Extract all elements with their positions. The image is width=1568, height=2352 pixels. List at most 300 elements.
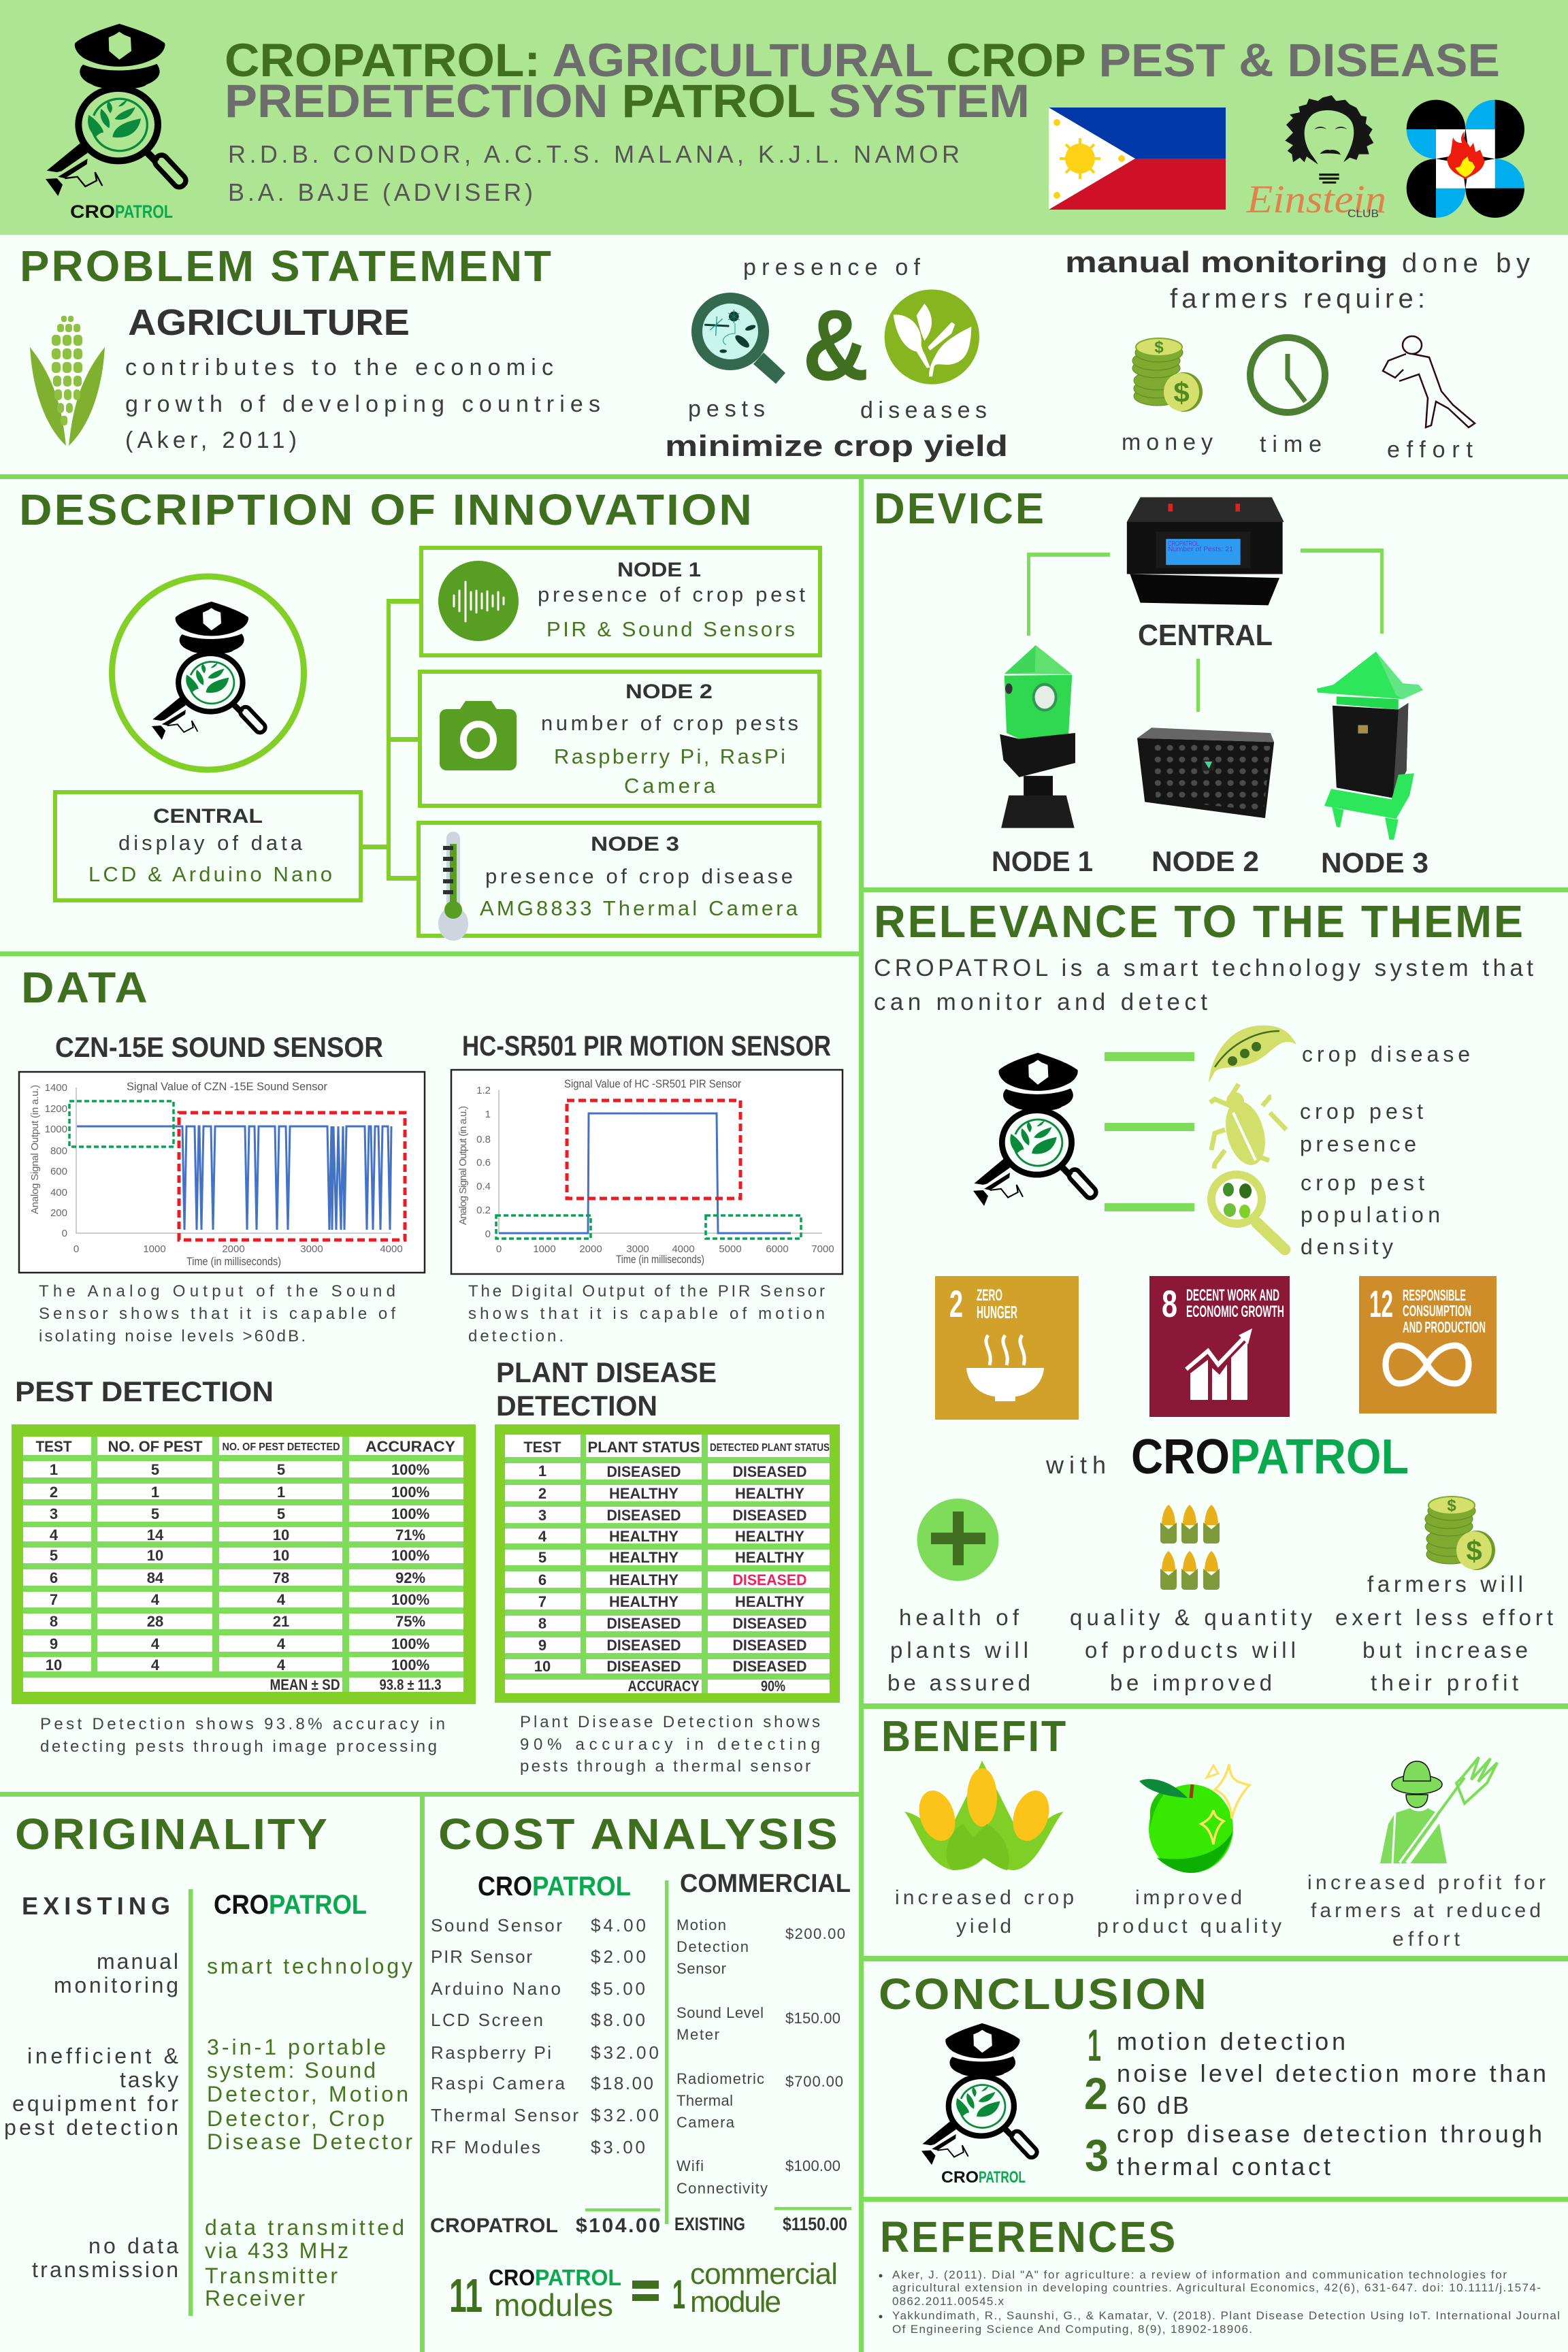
numbered conclusions: thermal contact [1117, 2153, 1330, 2180]
table: pest detection: 100% [391, 1635, 429, 1652]
icon: corn cobs [904, 1761, 1064, 1870]
text: manual monitoring: manual monitoring [1065, 246, 1388, 279]
table: pest detection: 1 [50, 1461, 58, 1478]
equation: modules comparison: CRO [489, 2265, 535, 2290]
icon: sdg 2 zero hunger: 2 [949, 1282, 963, 1325]
panel: references [864, 2197, 1568, 2336]
table: plant disease detection [495, 1424, 840, 1703]
list: commercial costs: Camera [676, 2114, 735, 2131]
text: pir sensor caption: detection. [468, 1327, 564, 1345]
icon: ampersand: & [802, 289, 869, 402]
table: plant disease detection: DISEASED [607, 1637, 681, 1654]
table: pest detection: 4 [50, 1526, 59, 1544]
table: plant disease detection: 1 [538, 1463, 546, 1480]
text: manual monitoring: farmers require: [1170, 284, 1425, 314]
icon: sound wave [438, 561, 519, 641]
icon: sdg 12 responsible consumption: RESPONSIBLE [1403, 1286, 1466, 1304]
chart: pir sensor: Time (in milliseconds) [616, 1253, 704, 1266]
list: cropatrol costs: PIR Sensor [431, 1946, 532, 1967]
text: presence of: presence of [743, 255, 921, 280]
text: increased profit [1307, 1872, 1546, 1950]
table: plant disease detection: 5 [538, 1549, 546, 1566]
label: node 1: NODE 1 [992, 845, 1093, 877]
device: node 1 [1000, 645, 1075, 828]
numbered conclusions: 2 [1084, 2068, 1108, 2119]
text: farmers effort: but increase [1362, 1637, 1528, 1663]
chart: sound sensor: Signal Value of CZN -15E Sound Sensor [127, 1080, 327, 1093]
table: plant disease detection: HEALTHY [735, 1485, 804, 1502]
text: relevance labels: density [1301, 1235, 1393, 1259]
equation: modules comparison: 1 [672, 2272, 685, 2317]
text: cropatrol points: via 433 MHz [205, 2238, 348, 2263]
chart: sound sensor: 400 [50, 1187, 67, 1198]
table: pest detection: 4 [277, 1656, 286, 1673]
heading: references: REFERENCES [880, 2212, 1177, 2261]
text: farmers effort: their profit [1371, 1670, 1518, 1695]
text: increased profit: farmers at reduced [1311, 1899, 1541, 1922]
list: cropatrol costs: Raspberry Pi [431, 2042, 551, 2063]
text: relevance labels: crop pest [1301, 1171, 1424, 1195]
table: plant disease detection: DISEASED [607, 1658, 681, 1675]
table: pest detection: 100% [391, 1484, 429, 1501]
text: quality and quantity [1070, 1605, 1312, 1695]
text: increased profit: increased profit for [1307, 1872, 1546, 1894]
table: plant disease detection: DETECTED PLANT STATUS [710, 1442, 830, 1454]
chart: sound sensor: 800 [50, 1145, 67, 1157]
heading: plant disease detection [496, 1356, 717, 1422]
icon: cropatrol logo: CRO [70, 201, 115, 222]
icon: einstein club logo [1246, 95, 1386, 221]
list: cropatrol costs: $32.00 [591, 2105, 659, 2125]
table: pest detection: 7 [50, 1591, 58, 1608]
icon: camera [440, 701, 517, 770]
chart: sound sensor: 1000 [143, 1243, 166, 1255]
text: existing points: no data [88, 2234, 178, 2258]
text: existing points: tasky [120, 2068, 178, 2092]
text: relevance labels: presence [1300, 1132, 1416, 1156]
table: plant disease detection: DISEASED [607, 1507, 681, 1524]
table: pest detection: 100% [391, 1547, 429, 1564]
equation: modules comparison: PATROL [535, 2265, 621, 2290]
text: health of plants: plants will [890, 1637, 1028, 1663]
table: plant disease detection: HEALTHY [609, 1549, 679, 1566]
heading: problem statement: PROBLEM STATEMENT [20, 242, 553, 291]
table: pest detection: 8 [50, 1613, 58, 1630]
heading: relevance: RELEVANCE TO THE THEME [874, 896, 1525, 947]
chart: pir sensor: 0 [496, 1243, 502, 1255]
chart: sound sensor: Analog Signal Output (in a.u.) [29, 1085, 41, 1214]
table: plant disease detection: DISEASED [732, 1658, 807, 1675]
table: plant disease detection: HEALTHY [609, 1528, 679, 1545]
numbered conclusions: motion detection [1117, 2027, 1345, 2055]
text: relevance intro [874, 955, 1533, 1015]
icon: diseases leaf [885, 289, 979, 385]
chart: pir sensor: 0.8 [476, 1134, 491, 1145]
device: central unit [1127, 497, 1284, 605]
panel: header [0, 0, 1568, 235]
panel: cost analysis [430, 1810, 851, 2323]
list: cropatrol costs: $4.00 [591, 1915, 646, 1936]
device screen text [1168, 540, 1233, 553]
table: pest detection: 21 [273, 1613, 289, 1630]
icon: money [1132, 338, 1203, 412]
equation: modules comparison: 11 [449, 2269, 483, 2322]
table: plant disease detection: 7 [538, 1593, 546, 1610]
table: pest detection: 14 [147, 1526, 164, 1544]
table: plant disease detection: TEST [524, 1439, 561, 1456]
text: sound sensor caption: Sensor shows that it is capable of [39, 1305, 395, 1323]
table: plant disease detection: DISEASED [732, 1507, 807, 1524]
total: cropatrol: $104.00 [576, 2215, 660, 2237]
list: commercial costs [676, 1916, 845, 2197]
total: cropatrol: CROPATROL [430, 2215, 558, 2237]
heading: data: DATA [21, 963, 150, 1012]
icon: pest population magnifier [1211, 1175, 1285, 1250]
list: cropatrol costs: $5.00 [591, 1978, 645, 1999]
text: manual monitoring [1065, 246, 1530, 314]
connector lines [1027, 549, 1384, 712]
panel: description of innovation [0, 474, 1568, 2352]
box: central [55, 792, 361, 900]
icon: cropatrol logo [46, 24, 188, 222]
list: cropatrol costs: Sound Sensor [431, 1915, 562, 1936]
text: existing points: transmission [32, 2257, 178, 2282]
chart: pir sensor: 0.2 [476, 1205, 491, 1216]
chart: pir sensor: 3000 [626, 1243, 649, 1255]
table: plant disease detection: 90% [761, 1678, 785, 1695]
chart: pir sensor: Analog Signal Output (in a.u.) [457, 1106, 469, 1225]
box: node 2: Camera [624, 774, 716, 798]
list: cropatrol costs: $3.00 [591, 2137, 645, 2157]
heading: pir sensor: HC-SR501 PIR MOTION SENSOR [462, 1030, 831, 1062]
table: plant disease detection: HEALTHY [735, 1528, 804, 1545]
chart: sound sensor: 0 [62, 1228, 67, 1239]
text: with cropatrol: PATROL [1230, 1430, 1409, 1484]
panel: data [0, 951, 861, 1776]
text: improved quality: improved [1135, 1886, 1242, 1909]
table: pest detection: 5 [277, 1505, 285, 1522]
list: cropatrol costs: $32.00 [591, 2042, 659, 2063]
table: pest detection [12, 1424, 476, 1704]
text: existing points: manual [97, 1949, 178, 1974]
text: cropatrol points: system: Sound [207, 2058, 376, 2082]
icon: diseased leaf [1209, 1026, 1296, 1083]
text: relevance labels [1300, 1042, 1470, 1259]
heading: pest detection: PEST DETECTION [15, 1375, 274, 1407]
chart: pir sensor: 6000 [766, 1243, 789, 1255]
table: plant disease detection: DISEASED [732, 1463, 807, 1480]
text: time label: time [1260, 431, 1322, 457]
icon: effort stick figure [1383, 336, 1475, 427]
logotype: cropatrol: CRO [478, 1872, 532, 1901]
box: node 2 [420, 672, 819, 806]
total: cropatrol [430, 2215, 660, 2237]
list: commercial costs: Sensor [676, 1960, 726, 1977]
text: sound sensor caption: isolating noise levels >60dB. [39, 1327, 306, 1345]
table: plant disease detection: HEALTHY [609, 1485, 679, 1502]
icon: logo [921, 2023, 1039, 2187]
text: relevance labels: crop disease [1302, 1042, 1470, 1066]
title: PREDETECTION PATROL SYSTEM [225, 75, 1030, 127]
chart: pir sensor: 0 [485, 1228, 491, 1240]
table: pest detection: MEAN ± SD [270, 1676, 340, 1693]
text: plant disease caption: pests through a thermal sensor [520, 1757, 811, 1776]
icon: cropatrol logo: PATROL [115, 201, 173, 222]
box: central: CENTRAL [153, 805, 263, 828]
list: cropatrol costs: RF Modules [431, 2137, 540, 2157]
logotype: cropatrol [214, 1890, 367, 1920]
numbered conclusions: 1 [1088, 2020, 1101, 2070]
list: commercial costs: $200.00 [785, 1925, 845, 1942]
table: plant disease detection: 9 [538, 1637, 546, 1654]
table: pest detection: TEST [35, 1438, 72, 1455]
text: plant disease caption: 90% accuracy in detecting [520, 1735, 820, 1754]
logotype: cropatrol [478, 1872, 631, 1901]
box: node 1 [421, 548, 820, 655]
list: commercial costs: $100.00 [785, 2157, 840, 2174]
heading: benefit: BENEFIT [881, 1712, 1068, 1761]
chart: sound sensor: 1200 [45, 1103, 67, 1115]
text: pests label: pests [688, 396, 765, 422]
text: relevance labels: population [1301, 1203, 1440, 1227]
text: existing points: inefficient & [27, 2044, 178, 2068]
connector bars [1105, 1052, 1194, 1211]
text: cropatrol points: Transmitter [205, 2264, 338, 2288]
total: existing: $1150.00 [783, 2214, 847, 2234]
box: node 3: AMG8833 Thermal Camera [480, 896, 798, 920]
device: node 3 [1317, 652, 1423, 840]
text: quality and quantity: of products will [1085, 1637, 1296, 1663]
title [225, 34, 1500, 127]
text: existing points: equipment for [12, 2091, 178, 2116]
box: node 3: presence of crop disease [485, 864, 793, 888]
text: existing points: pest detection [4, 2115, 178, 2140]
chart: pir sensor: 1 [485, 1109, 491, 1120]
text: pest detection caption: Pest Detection shows 93.8% accuracy in [40, 1715, 445, 1733]
chart: pir sensor: 0.6 [476, 1157, 491, 1169]
equation: modules comparison: module [690, 2285, 781, 2319]
chart: sound sensor: 3000 [300, 1243, 323, 1255]
icon: sdg 12 responsible consumption: CONSUMPTION [1403, 1302, 1471, 1320]
text: existing points [4, 1949, 178, 2282]
icon: thermometer [438, 832, 468, 941]
table: pest detection: 5 [277, 1461, 285, 1478]
box: node 1: presence of crop pest [538, 583, 805, 606]
table: pest detection: 28 [147, 1613, 163, 1630]
icon: coins [1425, 1497, 1495, 1570]
table: pest detection: NO. OF PEST [108, 1438, 203, 1455]
text: health of plants [887, 1605, 1030, 1695]
icon: logo: CRO [941, 2168, 979, 2187]
table: pest detection: 75% [395, 1613, 425, 1630]
heading: existing: EXISTING [22, 1892, 170, 1920]
panel: benefit [864, 1703, 1568, 1950]
table: pest detection: 5 [151, 1505, 159, 1522]
text: cropatrol points: Detector, Crop [207, 2106, 385, 2131]
text: plant disease caption [520, 1713, 820, 1776]
table: pest detection: 10 [273, 1547, 289, 1564]
chart: sound sensor: Time (in milliseconds) [186, 1255, 281, 1268]
text: health of plants: be assured [887, 1670, 1030, 1695]
equation: modules comparison [449, 2257, 838, 2323]
text: effort label: effort [1387, 437, 1473, 463]
list: commercial costs: Detection [676, 1938, 749, 1955]
text: relevance intro: can monitor and detect [874, 989, 1207, 1015]
total: existing [674, 2214, 847, 2234]
text: sound sensor caption [39, 1282, 395, 1345]
panel: relevance to the theme [864, 887, 1568, 1695]
chart: sound sensor: 2000 [222, 1243, 245, 1255]
table: pest detection: ACCURACY [365, 1438, 455, 1455]
chart: pir sensor: 4000 [672, 1243, 695, 1255]
text: farmers effort [1335, 1571, 1553, 1695]
table: pest detection: 4 [151, 1635, 160, 1652]
table: plant disease detection: DISEASED [607, 1463, 681, 1480]
table: pest detection: 92% [395, 1569, 425, 1586]
table: plant disease detection: HEALTHY [609, 1593, 679, 1610]
list: cropatrol costs: Thermal Sensor [431, 2105, 578, 2125]
list: cropatrol costs: Arduino Nano [431, 1978, 561, 1999]
table: pest detection: 100% [391, 1656, 429, 1673]
icon: einstein club logo: CLUB [1348, 208, 1379, 220]
icon: sdg 2 zero hunger: HUNGER [977, 1302, 1017, 1322]
box: node 2: Raspberry Pi, RasPi [554, 745, 785, 768]
box: node 2: number of crop pests [541, 711, 798, 735]
icon: pests magnifier [697, 298, 785, 384]
heading: description of innovation: DESCRIPTION OF INNOVATION [19, 485, 754, 534]
numbered conclusions: noise level detection more than [1117, 2059, 1546, 2087]
table: plant disease detection: ACCURACY [627, 1678, 700, 1695]
text: increased crop yield: increased crop [895, 1886, 1074, 1909]
list: commercial costs: Thermal [676, 2092, 733, 2109]
icon: sdg 8 decent work: ECONOMIC GROWTH [1186, 1303, 1284, 1321]
chart: sound sensor: 600 [50, 1166, 67, 1177]
text: agriculture description [125, 355, 600, 453]
table: plant disease detection: DISEASED [732, 1637, 807, 1654]
icon: pest bug [1210, 1084, 1286, 1169]
numbered conclusions: 60 dB [1117, 2091, 1189, 2119]
icon: sdg 2 zero hunger: ZERO [977, 1286, 1002, 1305]
logotype: cropatrol: PATROL [532, 1872, 631, 1901]
box: node 3 [419, 823, 819, 941]
table: pest detection: 6 [50, 1569, 58, 1586]
table: pest detection: 9 [50, 1635, 58, 1652]
heading: agriculture: AGRICULTURE [128, 302, 410, 343]
icon: einstein club logo: Einstein [1246, 177, 1386, 221]
authors: R.D.B. CONDOR, A.C.T.S. MALANA, K.J.L. NAMOR [228, 140, 960, 168]
text: reference list [879, 2268, 1560, 2336]
chart: pir sensor: Signal Value of HC -SR501 PIR Sensor [564, 1077, 741, 1090]
list: cropatrol costs: $2.00 [591, 1946, 646, 1967]
chart: pir sensor: 1.2 [476, 1085, 491, 1096]
text: cropatrol points: smart technology [207, 1954, 412, 1978]
text: quality and quantity: quality & quantity [1070, 1605, 1312, 1630]
table: plant disease detection: HEALTHY [735, 1593, 804, 1610]
text: plant disease caption: Plant Disease Detection shows [520, 1713, 820, 1731]
icon: sdg 12 responsible consumption: 12 [1369, 1282, 1393, 1325]
icon: philippine flag [1049, 108, 1226, 210]
text: cropatrol points: Detector, Motion [207, 2082, 408, 2106]
list: commercial costs: Sound Level [676, 2004, 764, 2021]
list: cropatrol costs: Raspi Camera [431, 2073, 566, 2093]
text: cropatrol points: data transmitted [205, 2215, 404, 2240]
text: money label: money [1122, 429, 1213, 455]
chart: sound sensor [19, 1072, 425, 1273]
table: pest detection: 4 [277, 1591, 286, 1608]
box: central: LCD & Arduino Nano [88, 862, 332, 886]
text: with cropatrol: with [1045, 1451, 1106, 1479]
text: cropatrol points: Receiver [205, 2286, 305, 2310]
heading: plant disease detection: DETECTION [496, 1390, 657, 1422]
table: pest detection: 4 [151, 1591, 160, 1608]
text: manual monitoring: done by [1402, 248, 1530, 278]
text: improved quality [1097, 1886, 1281, 1938]
table: pest detection: 71% [395, 1526, 425, 1544]
icon: sdg 8 decent work [1149, 1276, 1290, 1417]
text: reference list: Of Engineering Science And Computing, 8(9), 18902-18906. [892, 2323, 1252, 2336]
table: pest detection: 93.8 ± 11.3 [380, 1676, 441, 1693]
icon: sdg 8 decent work: 8 [1162, 1282, 1177, 1325]
table: pest detection: 5 [151, 1461, 159, 1478]
heading: conclusion: CONCLUSION [879, 1970, 1209, 2019]
table: pest detection: 100% [391, 1505, 429, 1522]
total: existing: EXISTING [674, 2214, 745, 2234]
list: commercial costs: $700.00 [785, 2073, 843, 2090]
chart: sound sensor: 1000 [45, 1124, 67, 1135]
chart: pir sensor: 1000 [533, 1243, 556, 1255]
chart: sound sensor: 4000 [380, 1243, 403, 1255]
icon: clock [1250, 338, 1325, 412]
panel: device [874, 484, 1428, 879]
label: node 3: NODE 3 [1321, 847, 1428, 879]
text: agriculture description: contributes to the economic [125, 355, 553, 380]
list: commercial costs: Radiometric [676, 2070, 764, 2087]
table: pest detection: 84 [147, 1569, 164, 1586]
box: node 3: NODE 3 [591, 833, 679, 855]
chart: sound sensor: 200 [50, 1207, 67, 1219]
text: pest detection caption: detecting pests through image processing [40, 1737, 437, 1756]
icon: logo in circle [112, 576, 304, 770]
text: increased crop yield [895, 1886, 1074, 1938]
chart: pir sensor: 5000 [719, 1243, 742, 1255]
table: pest detection: 1 [277, 1484, 285, 1501]
text: increased profit: effort [1392, 1928, 1460, 1950]
heading: commercial: COMMERCIAL [680, 1869, 851, 1898]
list: cropatrol costs [431, 1915, 659, 2157]
text: improved quality: product quality [1097, 1915, 1281, 1938]
logotype: cropatrol: CRO [214, 1890, 269, 1920]
text: pir sensor caption [468, 1282, 825, 1345]
text: minimize crop yield: minimize crop yield [665, 429, 1008, 463]
heading: device: DEVICE [874, 484, 1046, 533]
table: plant disease detection: HEALTHY [609, 1571, 679, 1588]
table: plant disease detection: DISEASED [732, 1571, 807, 1588]
chart: sound sensor: 1400 [45, 1082, 67, 1094]
panel: problem statement [20, 242, 1530, 463]
list: cropatrol costs: LCD Screen [431, 2010, 543, 2030]
table: plant disease detection: 2 [538, 1485, 546, 1502]
table: plant disease detection: DISEASED [607, 1615, 681, 1632]
icon: logo: PATROL [979, 2168, 1026, 2187]
table: pest detection: 10 [273, 1526, 289, 1544]
numbered conclusions [1084, 2020, 1546, 2180]
text: with cropatrol: CRO [1131, 1430, 1230, 1484]
equation: modules comparison: modules [494, 2287, 613, 2323]
text: health of plants: health of [899, 1605, 1019, 1630]
heading: cost analysis: COST ANALYSIS [438, 1810, 840, 1859]
chart: pir sensor [451, 1070, 843, 1274]
text: reference list: Yakkundimath, R., Saunshi, G., & Kamatar, V. (2018). Plant Disease Detection Using IoT. International Journal [892, 2309, 1560, 2322]
